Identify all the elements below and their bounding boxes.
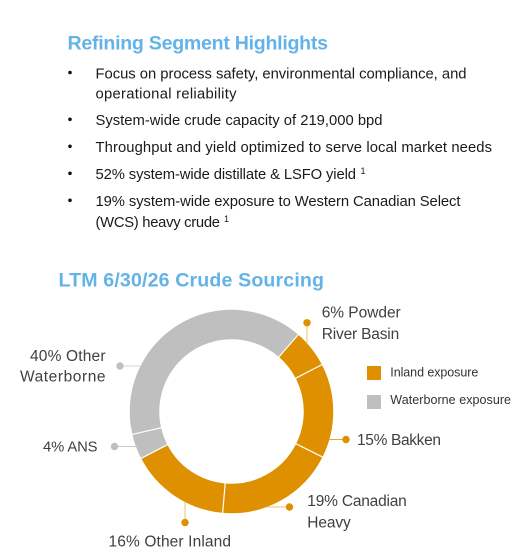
legend item: waterborne exposure: Waterborne exposure [390, 393, 511, 407]
callout: 40% Other Waterborne: 40% Other [30, 348, 106, 365]
segment: 40% Other Waterborne [127, 307, 336, 516]
segment: 16% Other Inland [137, 317, 326, 506]
heading: crude sourcing: LTM 6/30/26 Crude Sourcing [58, 270, 324, 292]
bullet: process safety [68, 66, 466, 102]
bullet: WCS exposure [68, 194, 460, 231]
callout: 6% Powder River Basin: River Basin [322, 326, 399, 343]
callout: 16% Other Inland: 16% Other Inland [108, 534, 231, 551]
bullet: distillate yield: 52% system-wide distillate & LSFO yield [96, 167, 356, 183]
bullet: throughput and yield: Throughput and yield optimized to serve local market needs [96, 140, 492, 156]
bullet: WCS exposure: (WCS) heavy crude [96, 215, 220, 231]
segment: 19% Canadian Heavy [115, 295, 348, 528]
callout: 16% Other Inland [108, 502, 231, 551]
bullet: distillate yield: 1 [360, 166, 366, 176]
legend item: inland exposure: Inland exposure [390, 366, 478, 380]
bullet: WCS exposure: 1 [224, 214, 229, 224]
callout: 40% Other Waterborne [20, 348, 141, 386]
callout: 19% Canadian Heavy: 19% Canadian [307, 493, 407, 510]
bullet: crude capacity: System-wide crude capacity of 219,000 bpd [96, 113, 382, 129]
callout: 19% Canadian Heavy [266, 493, 407, 531]
bullet: WCS exposure: 19% system-wide exposure to Western Canadian Select [96, 194, 460, 210]
callout: 19% Canadian Heavy: Heavy [307, 514, 351, 531]
callout: 40% Other Waterborne: Waterborne [20, 369, 106, 386]
bullet list [68, 66, 492, 231]
callout: 6% Powder River Basin: 6% Powder [322, 305, 401, 322]
callout: 4% ANS [43, 440, 136, 456]
segment: 4% ANS [114, 294, 349, 529]
callout: 4% ANS: 4% ANS [43, 440, 98, 456]
segment: 6% Powder River Basin [109, 289, 354, 534]
title: refining segment highlights: Refining Segment Highlights [68, 32, 328, 54]
legend [367, 366, 511, 409]
segment: 15% Bakken [114, 294, 349, 529]
callout: 6% Powder River Basin [303, 305, 401, 344]
bullet: process safety: Focus on process safety, environmental compliance, and [96, 66, 466, 82]
callout: 15% Bakken: 15% Bakken [357, 432, 441, 449]
bullet: process safety: operational reliability [96, 86, 237, 102]
donut chart [109, 289, 354, 534]
